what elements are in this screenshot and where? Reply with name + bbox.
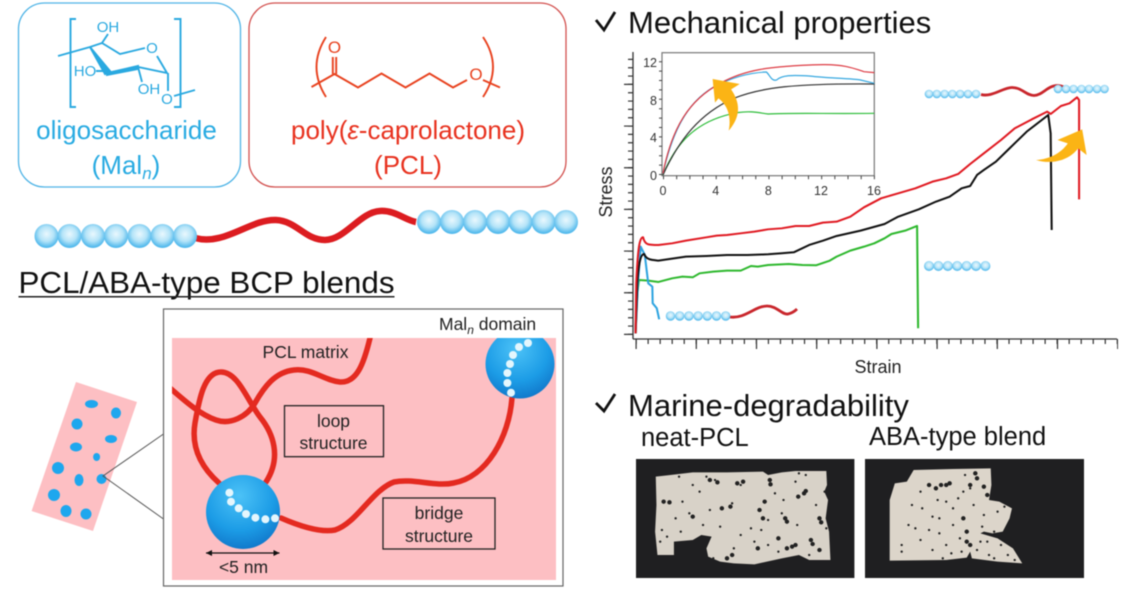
chemical structure: PCL repeat unit [312, 37, 500, 97]
inset tick labels: 12 [643, 56, 657, 70]
arrow: main yellow [1036, 129, 1087, 162]
sphere: bottom domain [206, 475, 280, 549]
inset tick labels: 8 [765, 184, 772, 198]
chemical structure: Mal repeat unit: O [146, 40, 158, 57]
label: loop structure [284, 406, 384, 457]
ABA chain legend [925, 85, 1109, 98]
label: bridge structure [383, 498, 495, 549]
inset tick labels: 4 [712, 184, 719, 198]
curve: black [636, 115, 1052, 333]
label: oligosaccharide: oligosaccharide [36, 115, 217, 145]
label: Mal n: (Mal [92, 150, 142, 180]
label: Mal n domain: Mal [439, 314, 467, 334]
panel: blend morphology [164, 309, 563, 586]
inset tick labels [643, 56, 881, 198]
label: Mal n domain: domain [474, 314, 536, 334]
sphere: top domain [486, 330, 554, 398]
chemical structure: Mal repeat unit: OH [97, 19, 119, 36]
label: PCL matrix: PCL matrix [263, 342, 349, 362]
inset tick labels: 12 [814, 184, 828, 198]
inset tick labels: 8 [650, 94, 657, 108]
label: bridge structure: bridge [415, 503, 463, 523]
label: Mal n domain: n [467, 323, 474, 337]
chemical structure: PCL repeat unit: O [328, 38, 341, 57]
panel: PCL [249, 3, 566, 187]
chemical structure: Mal repeat unit: OH [138, 81, 160, 98]
axes [628, 52, 1118, 344]
label: loop structure: structure [299, 433, 368, 453]
label: neat-PCL: neat-PCL [641, 424, 749, 452]
inset tick labels: 0 [650, 169, 657, 183]
arrow: inset yellow [713, 79, 740, 131]
curve: blue [636, 247, 659, 333]
heading: Marine-degradability: Marine-degradability [628, 388, 909, 423]
heading: Mechanical properties: Mechanical properties [628, 5, 931, 40]
icon: check mark [596, 12, 615, 30]
curve: red [636, 97, 1079, 333]
chemical structure: Mal repeat unit: O [161, 91, 173, 108]
label: loop structure: loop [317, 411, 350, 431]
callout lines [103, 434, 164, 519]
chemical structure: Mal repeat unit [58, 19, 195, 108]
scale arrow: under 5 nm [206, 550, 280, 577]
label: Mal n: n [142, 164, 152, 183]
icon: check mark [596, 394, 615, 411]
label: ABA-type blend: ABA-type blend [869, 423, 1046, 451]
inset tick labels: 4 [650, 131, 657, 145]
axis label: Stress: Stress [596, 166, 616, 218]
label: PCL: (PCL) [374, 150, 442, 180]
curve: green [636, 226, 918, 333]
chemical structure: PCL repeat unit: O [469, 65, 483, 84]
label: poly(e-caprolactone): poly(ε-caprolactone) [291, 115, 525, 145]
chemical structure: Mal repeat unit: HO [74, 63, 96, 80]
main curves [636, 97, 1079, 333]
AB diblock legend [666, 306, 797, 321]
ABA triblock chain [34, 210, 578, 248]
axis label: Strain: Strain [854, 357, 902, 377]
heading: PCL/ABA-type BCP blends: PCL/ABA-type BCP blends [18, 265, 394, 300]
inset tick labels: 16 [867, 184, 881, 198]
inset tick labels: 0 [660, 184, 667, 198]
panel: oligosaccharide [18, 3, 240, 187]
red PCL chains [170, 338, 512, 531]
inset chart [643, 53, 881, 198]
photo: neat-PCL [636, 459, 854, 578]
chart: stress-strain [596, 52, 1118, 377]
label: Mal n: ) [152, 150, 160, 180]
film sample with domains [32, 382, 137, 531]
A block legend [924, 261, 990, 271]
label: bridge structure: structure [405, 526, 473, 546]
photo: ABA-type blend [865, 459, 1084, 578]
scale arrow: under 5 nm: <5 nm [219, 557, 268, 577]
